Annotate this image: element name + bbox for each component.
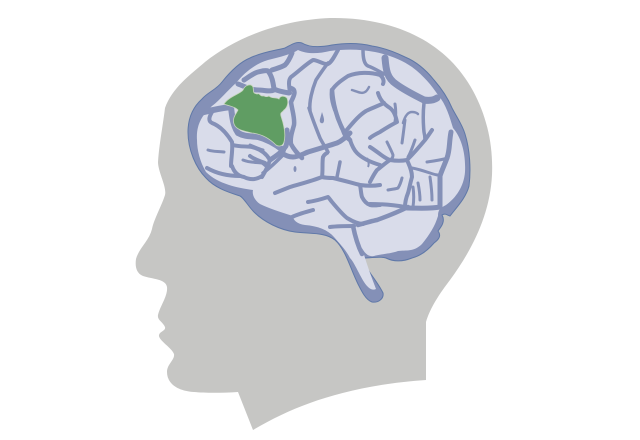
brain sulci: dark folds [200,50,451,254]
sulcus spot [294,166,296,172]
sulcus teardrop [320,112,324,123]
brain outline [188,42,470,302]
green highlighted region [224,85,288,146]
head silhouette [136,18,492,430]
sulcus crescent [367,158,369,167]
brain gyri: light lobes [197,50,465,290]
